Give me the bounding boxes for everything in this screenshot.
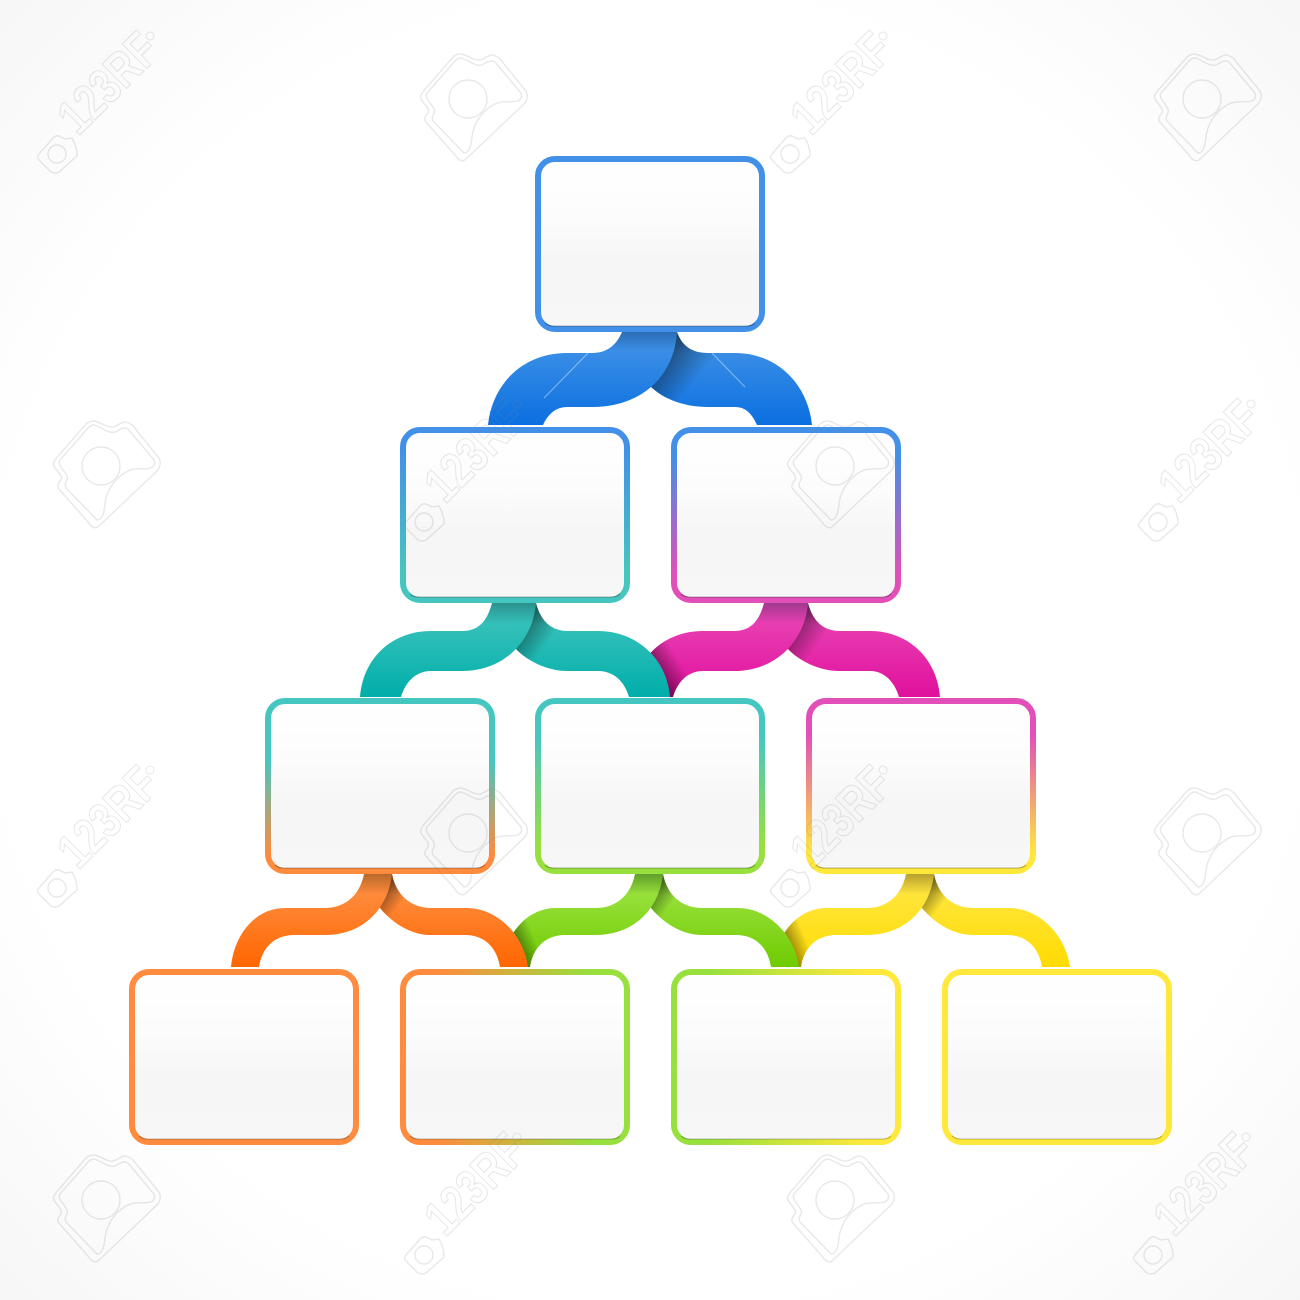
connector ribbons: third level (green) — [502, 874, 799, 967]
box: level 4 third (green to yellow) — [674, 972, 898, 1142]
box: level 3 left (teal to orange) — [268, 701, 492, 871]
connector ribbons: second level (magenta) — [632, 603, 940, 697]
watermark: 123RF logos: 123RF — [46, 21, 170, 145]
connector ribbons: third level (orange) — [231, 874, 528, 967]
watermark: 123RF logos: 123RF — [1142, 1122, 1266, 1246]
box: level 2 left (blue to teal) — [403, 430, 627, 600]
box: level 1 top (blue) — [538, 159, 762, 329]
connector ribbons: third level (yellow) — [773, 874, 1070, 967]
box: level 4 second (orange to green) — [403, 972, 627, 1142]
box: level 4 fourth (yellow) — [945, 972, 1169, 1142]
watermark: 123RF logos: 123RF — [46, 755, 170, 879]
watermark: 123RF logos: 123RF — [413, 1122, 537, 1246]
watermark: 123RF logos: 123RF — [779, 21, 903, 145]
connector ribbons: second level (teal) — [360, 603, 670, 697]
watermark: 123RF logos: 123RF — [1147, 389, 1271, 513]
watermark: 123RF logos: 123RF — [413, 389, 537, 513]
box: level 2 right (blue to magenta) — [674, 430, 898, 600]
connector ribbons: top level (blue) — [488, 332, 812, 425]
box: level 4 first (orange) — [132, 972, 356, 1142]
box: level 3 right (magenta to yellow) — [809, 701, 1033, 871]
watermark: 123RF logos: 123RF — [779, 755, 903, 879]
box: level 3 centre (teal to green) — [538, 701, 762, 871]
